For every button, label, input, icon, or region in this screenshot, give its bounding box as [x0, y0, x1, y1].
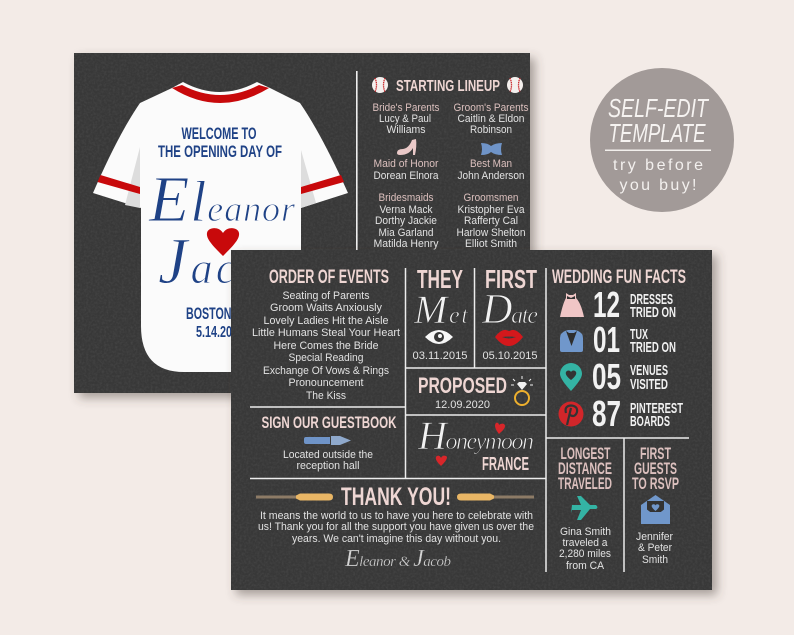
- panel: thank you: [256, 483, 534, 572]
- panel: longest distance traveled: TRAVELED: [558, 474, 612, 493]
- panel: they met: 03.11.2015: [412, 350, 468, 362]
- fact: dresses: DRESSES: [630, 291, 673, 308]
- panel: first date: [481, 264, 538, 362]
- icon: red heart: [207, 228, 239, 256]
- icon: eye: [425, 330, 453, 344]
- panel: longest distance traveled: [558, 444, 612, 572]
- panel: first guests to rsvp: [632, 444, 679, 566]
- events list: Groom Waits Anxiously: [270, 302, 383, 314]
- icon: bat right: [457, 494, 534, 500]
- fact: pinterest: [558, 393, 683, 434]
- panel: they met: THEY: [417, 264, 463, 294]
- script word: Date: [481, 287, 538, 333]
- best man: John Anderson: [458, 170, 524, 182]
- fact: tux: [560, 319, 676, 360]
- script word: Met: [413, 287, 469, 332]
- icon: red lips: [495, 330, 523, 346]
- icon: baseball left: [372, 77, 388, 93]
- panel: guestbook: [262, 413, 397, 472]
- panel: first guests to rsvp: & Peter: [638, 542, 672, 554]
- date: 5.14.2020: [196, 324, 244, 341]
- panel: self-edit badge: try before: [613, 157, 703, 174]
- message: years. We can't imagine this day without you.: [292, 533, 501, 545]
- fact: dresses: [560, 284, 676, 325]
- panel: longest distance traveled: 2,280 miles: [559, 548, 612, 560]
- bridesmaids: Mia Garland: [378, 227, 434, 239]
- events list: Here Comes the Bride: [274, 340, 378, 352]
- fact: pinterest: BOARDS: [630, 413, 670, 430]
- bride's parents: Bride's Parents: [372, 102, 440, 114]
- fact: tux: 01: [593, 319, 620, 360]
- jersey illustration: THE OPENING DAY OF: [158, 142, 282, 161]
- fact: tux: TUX: [630, 326, 648, 343]
- panel: starting lineup: [372, 77, 529, 250]
- maid of honor: [374, 158, 439, 182]
- groom's parents: [454, 102, 529, 136]
- icon: airplane: [571, 496, 598, 520]
- groom's parents: Groom's Parents: [454, 102, 529, 114]
- panel: self-edit badge: SELF-EDIT: [608, 93, 710, 123]
- events list: Special Reading: [288, 352, 364, 364]
- events list: The Kiss: [306, 390, 347, 402]
- groom's parents: Caitlin & Eldon: [458, 113, 524, 125]
- panel: self-edit badge: [590, 68, 734, 212]
- panel: honeymoon: FRANCE: [482, 454, 529, 474]
- icon: bow tie: [481, 143, 502, 155]
- fact: venues: 05: [592, 356, 621, 397]
- panel: front card: [231, 250, 712, 590]
- groomsmen: Harlow Shelton: [456, 227, 526, 239]
- fact: venues: VISITED: [630, 376, 668, 393]
- panel: first date: FIRST: [485, 264, 537, 294]
- events list: Seating of Parents: [282, 290, 370, 302]
- bridesmaids: [374, 192, 439, 250]
- icon: bat left: [256, 494, 333, 500]
- icon: envelope: [641, 495, 670, 524]
- panel: longest distance traveled: from CA: [566, 560, 605, 572]
- groomsmen: [456, 192, 526, 250]
- panel: order of events: [252, 266, 400, 402]
- panel: self-edit badge: TEMPLATE: [608, 118, 706, 148]
- events list: Lovely Ladies Hit the Aisle: [264, 315, 388, 327]
- bride's parents: Lucy & Paul: [379, 113, 431, 125]
- events list: Little Humans Steal Your Heart: [252, 327, 400, 339]
- fact: pinterest: 87: [592, 393, 621, 434]
- bride's parents: [372, 102, 440, 136]
- groom's parents: Robinson: [470, 124, 512, 136]
- events list: Pronouncement: [288, 377, 364, 389]
- panel: back card: [74, 53, 530, 393]
- maid of honor: Maid of Honor: [374, 158, 439, 170]
- bridesmaids: Dorthy Jackie: [375, 215, 437, 227]
- message: [258, 510, 534, 545]
- panel: they met: [412, 264, 469, 362]
- panel: honeymoon: Honeymoon: [417, 413, 534, 458]
- panel: guestbook: reception hall: [296, 460, 360, 472]
- panel: first guests to rsvp: FIRST: [640, 444, 671, 463]
- panel: first date: 05.10.2015: [482, 350, 538, 362]
- message: us! Thank you for all the support you have given us over the: [258, 521, 534, 533]
- handle shading: [256, 496, 534, 498]
- heading: ORDER OF EVENTS: [269, 266, 389, 288]
- groom name: Jacob: [158, 225, 286, 298]
- events list: Exchange Of Vows & Rings: [263, 365, 390, 377]
- panel: first guests to rsvp: Jennifer: [636, 531, 673, 543]
- fact: dresses: TRIED ON: [630, 304, 676, 321]
- panel: proposed: 12.09.2020: [435, 399, 490, 411]
- heading: STARTING LINEUP: [396, 78, 500, 95]
- panel: guestbook: SIGN OUR GUESTBOOK: [262, 413, 397, 432]
- fact: venues: VENUES: [630, 362, 668, 379]
- fact: pinterest: PINTEREST: [630, 400, 683, 417]
- panel: proposed: PROPOSED: [418, 373, 507, 398]
- bridesmaids: Verna Mack: [380, 204, 433, 216]
- panel: longest distance traveled: LONGEST: [560, 444, 611, 463]
- icon: diamond ring: [511, 376, 533, 405]
- maid of honor: Dorean Elnora: [374, 170, 438, 182]
- icon: pen: [304, 436, 351, 445]
- message: It means the world to us to have you here to celebrate with: [260, 510, 533, 522]
- fact: venues: [560, 356, 668, 397]
- jersey welcome text: WELCOME TO: [182, 124, 256, 143]
- panel: wedding fun facts: [552, 266, 686, 434]
- bridesmaids: Matilda Henry: [374, 238, 439, 250]
- panel: proposed: [418, 373, 533, 411]
- panel: first guests to rsvp: GUESTS: [634, 459, 677, 478]
- fact: dresses: 12: [593, 284, 620, 325]
- events list: [252, 290, 400, 402]
- panel: first guests to rsvp: TO RSVP: [632, 474, 679, 493]
- groomsmen: Kristopher Eva: [458, 204, 524, 216]
- icon: high heel: [397, 139, 416, 155]
- panel: wedding fun facts: WEDDING FUN FACTS: [552, 266, 686, 288]
- bride name: Eleanor: [148, 163, 296, 236]
- panel: thank you: THANK YOU!: [341, 483, 451, 511]
- best man: Best Man: [470, 158, 512, 170]
- location: BOSTON, MA: [186, 304, 254, 323]
- bridesmaids: Bridesmaids: [378, 192, 434, 204]
- panel: first guests to rsvp: Smith: [642, 554, 668, 566]
- icon: heart: [495, 423, 505, 434]
- groomsmen: Elliot Smith: [465, 238, 517, 250]
- panel: longest distance traveled: DISTANCE: [558, 459, 612, 478]
- signature: Eleanor & Jacob: [344, 546, 452, 572]
- groomsmen: Groomsmen: [464, 192, 518, 204]
- panel: longest distance traveled: traveled a: [562, 537, 608, 549]
- jersey illustration: [93, 82, 348, 372]
- best man: [458, 158, 524, 182]
- panel: self-edit badge: you buy!: [620, 177, 696, 194]
- icon: baseball right: [507, 77, 523, 93]
- icon: heart: [436, 456, 447, 466]
- panel: longest distance traveled: Gina Smith: [560, 526, 611, 538]
- panel: guestbook: Located outside the: [283, 449, 373, 461]
- bride's parents: Williams: [386, 124, 426, 136]
- fact: tux: TRIED ON: [630, 339, 676, 356]
- groomsmen: Rafferty Cal: [464, 215, 518, 227]
